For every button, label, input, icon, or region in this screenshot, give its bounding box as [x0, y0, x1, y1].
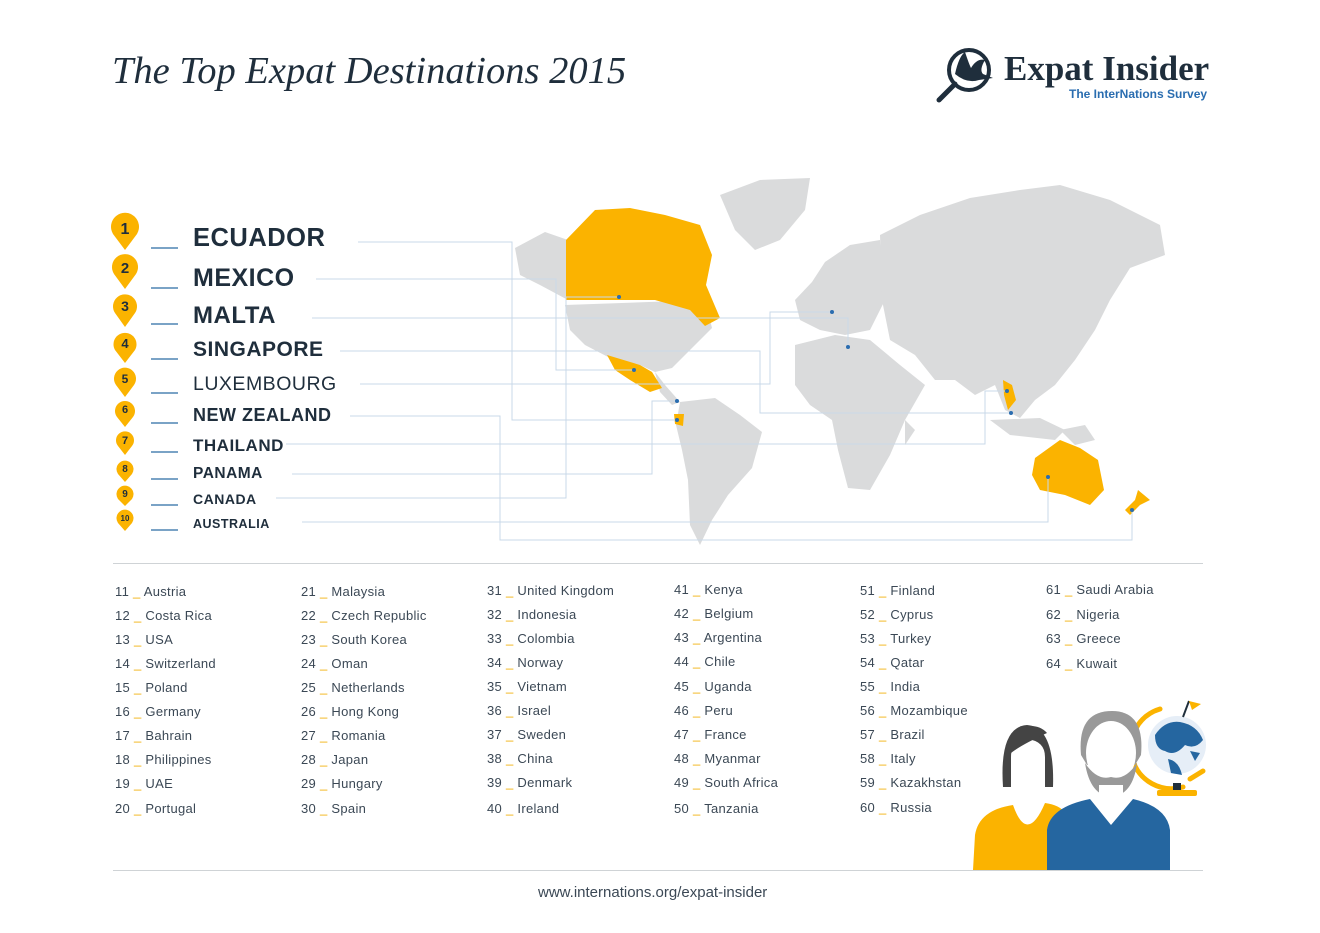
pins: 5 — [122, 372, 129, 386]
ranks 11-60 list: 28 _ Japan — [301, 752, 368, 767]
ranks 11-60 list: 29 _ Hungary — [301, 776, 383, 791]
ranks 11-60 list: 38 _ China — [487, 751, 553, 766]
ranks 11-60 list: 18 _ Philippines — [115, 752, 212, 767]
ranks 11-60 list: 24 _ Oman — [301, 656, 368, 671]
pins: 2 — [121, 260, 129, 277]
ranks 11-60 list: 31 _ United Kingdom — [487, 583, 614, 598]
man — [1047, 711, 1170, 870]
ranks 61-64: 63 _ Greece — [1046, 631, 1121, 646]
ranks 11-60 list: 46 _ Peru — [674, 703, 733, 718]
text: ECUADOR — [193, 224, 325, 252]
text: NEW ZEALAND — [193, 405, 332, 425]
ranks 11-60 list: 41 _ Kenya — [674, 582, 743, 597]
ranks 11-60 list: 57 _ Brazil — [860, 727, 925, 742]
ranks 11-60 list: 49 _ South Africa — [674, 775, 778, 790]
ranks 11-60 list: 16 _ Germany — [115, 704, 201, 719]
icon: magnifier bird — [936, 48, 993, 102]
world map — [276, 178, 1165, 545]
ranks 11-60 list: 44 _ Chile — [674, 654, 736, 669]
text: LUXEMBOURG — [193, 373, 337, 395]
ranks 61-64 — [1046, 582, 1154, 671]
ranks 11-60 list: 32 _ Indonesia — [487, 607, 577, 622]
ranks 11-60 list: 13 _ USA — [115, 632, 173, 647]
pins: 7 — [122, 435, 128, 447]
text: PANAMA — [193, 465, 263, 482]
ranks 11-60 list: 26 _ Hong Kong — [301, 704, 399, 719]
ranks 11-60 list: 60 _ Russia — [860, 800, 932, 815]
woman — [973, 725, 1065, 870]
ranks 11-60 list: 50 _ Tanzania — [674, 801, 759, 816]
ranks 11-60 list: 37 _ Sweden — [487, 727, 566, 742]
logo — [936, 48, 1209, 102]
ranks 11-60 list: 40 _ Ireland — [487, 801, 559, 816]
pins: 10 — [121, 514, 130, 523]
ranks 11-60 list: 30 _ Spain — [301, 801, 366, 816]
pins: 3 — [121, 298, 129, 314]
ranks 11-60 list: 58 _ Italy — [860, 751, 916, 766]
ranks 11-60 list — [115, 582, 968, 816]
ranks 11-60 list: 53 _ Turkey — [860, 631, 931, 646]
ranks 11-60 list: 14 _ Switzerland — [115, 656, 216, 671]
ranks 11-60 list: 12 _ Costa Rica — [115, 608, 212, 623]
ranks 11-60 list: 23 _ South Korea — [301, 632, 407, 647]
ranks 61-64: 61 _ Saudi Arabia — [1046, 582, 1154, 597]
ranks 11-60 list: 51 _ Finland — [860, 583, 935, 598]
text: MEXICO — [193, 264, 295, 292]
ranks 11-60 list: 34 _ Norway — [487, 655, 563, 670]
ranks 11-60 list: 54 _ Qatar — [860, 655, 924, 670]
ranks 11-60 list: 36 _ Israel — [487, 703, 551, 718]
pins: 6 — [122, 404, 128, 416]
illustration: expats with globe — [973, 700, 1206, 870]
ranks 11-60 list: 27 _ Romania — [301, 728, 386, 743]
ranks 11-60 list: 43 _ Argentina — [674, 630, 762, 645]
ranks 11-60 list: 21 _ Malaysia — [301, 584, 385, 599]
pins: 9 — [122, 489, 128, 500]
ranks 11-60 list: 56 _ Mozambique — [860, 703, 968, 718]
pins: 8 — [122, 464, 128, 475]
ranks 11-60 list: 52 _ Cyprus — [860, 607, 933, 622]
ranks 11-60 list: 48 _ Myanmar — [674, 751, 761, 766]
ranks 11-60 list: 35 _ Vietnam — [487, 679, 567, 694]
top 10 list — [111, 212, 139, 531]
ranks 11-60 list: 47 _ France — [674, 727, 747, 742]
globe — [1131, 701, 1206, 796]
ranks 11-60 list: 19 _ UAE — [115, 776, 173, 791]
text: AUSTRALIA — [193, 517, 270, 531]
ranks 11-60 list: 22 _ Czech Republic — [301, 608, 427, 623]
logo: Expat Insider — [1004, 49, 1209, 88]
ranks 11-60 list: 17 _ Bahrain — [115, 728, 192, 743]
title: The Top Expat Destinations 2015 — [112, 50, 626, 92]
pins: 1 — [121, 221, 130, 238]
ranks 11-60 list: 45 _ Uganda — [674, 679, 752, 694]
ranks 61-64: 62 _ Nigeria — [1046, 607, 1120, 622]
text: THAILAND — [193, 436, 284, 455]
logo: The InterNations Survey — [1069, 87, 1207, 101]
footer url: www.internations.org/expat-insider — [538, 884, 767, 901]
ranks 11-60 list: 11 _ Austria — [115, 584, 186, 599]
pins — [111, 212, 139, 531]
pins: 4 — [121, 336, 129, 351]
text: CANADA — [193, 491, 257, 507]
ranks 11-60 list: 39 _ Denmark — [487, 775, 572, 790]
text: MALTA — [193, 302, 276, 329]
ranks 61-64: 64 _ Kuwait — [1046, 656, 1117, 671]
ranks 11-60 list: 20 _ Portugal — [115, 801, 196, 816]
text: SINGAPORE — [193, 338, 324, 361]
ranks 11-60 list: 59 _ Kazakhstan — [860, 775, 961, 790]
ranks 11-60 list: 15 _ Poland — [115, 680, 188, 695]
ranks 11-60 list: 55 _ India — [860, 679, 920, 694]
ranks 11-60 list: 33 _ Colombia — [487, 631, 575, 646]
ranks 11-60 list: 42 _ Belgium — [674, 606, 754, 621]
ranks 11-60 list: 25 _ Netherlands — [301, 680, 405, 695]
